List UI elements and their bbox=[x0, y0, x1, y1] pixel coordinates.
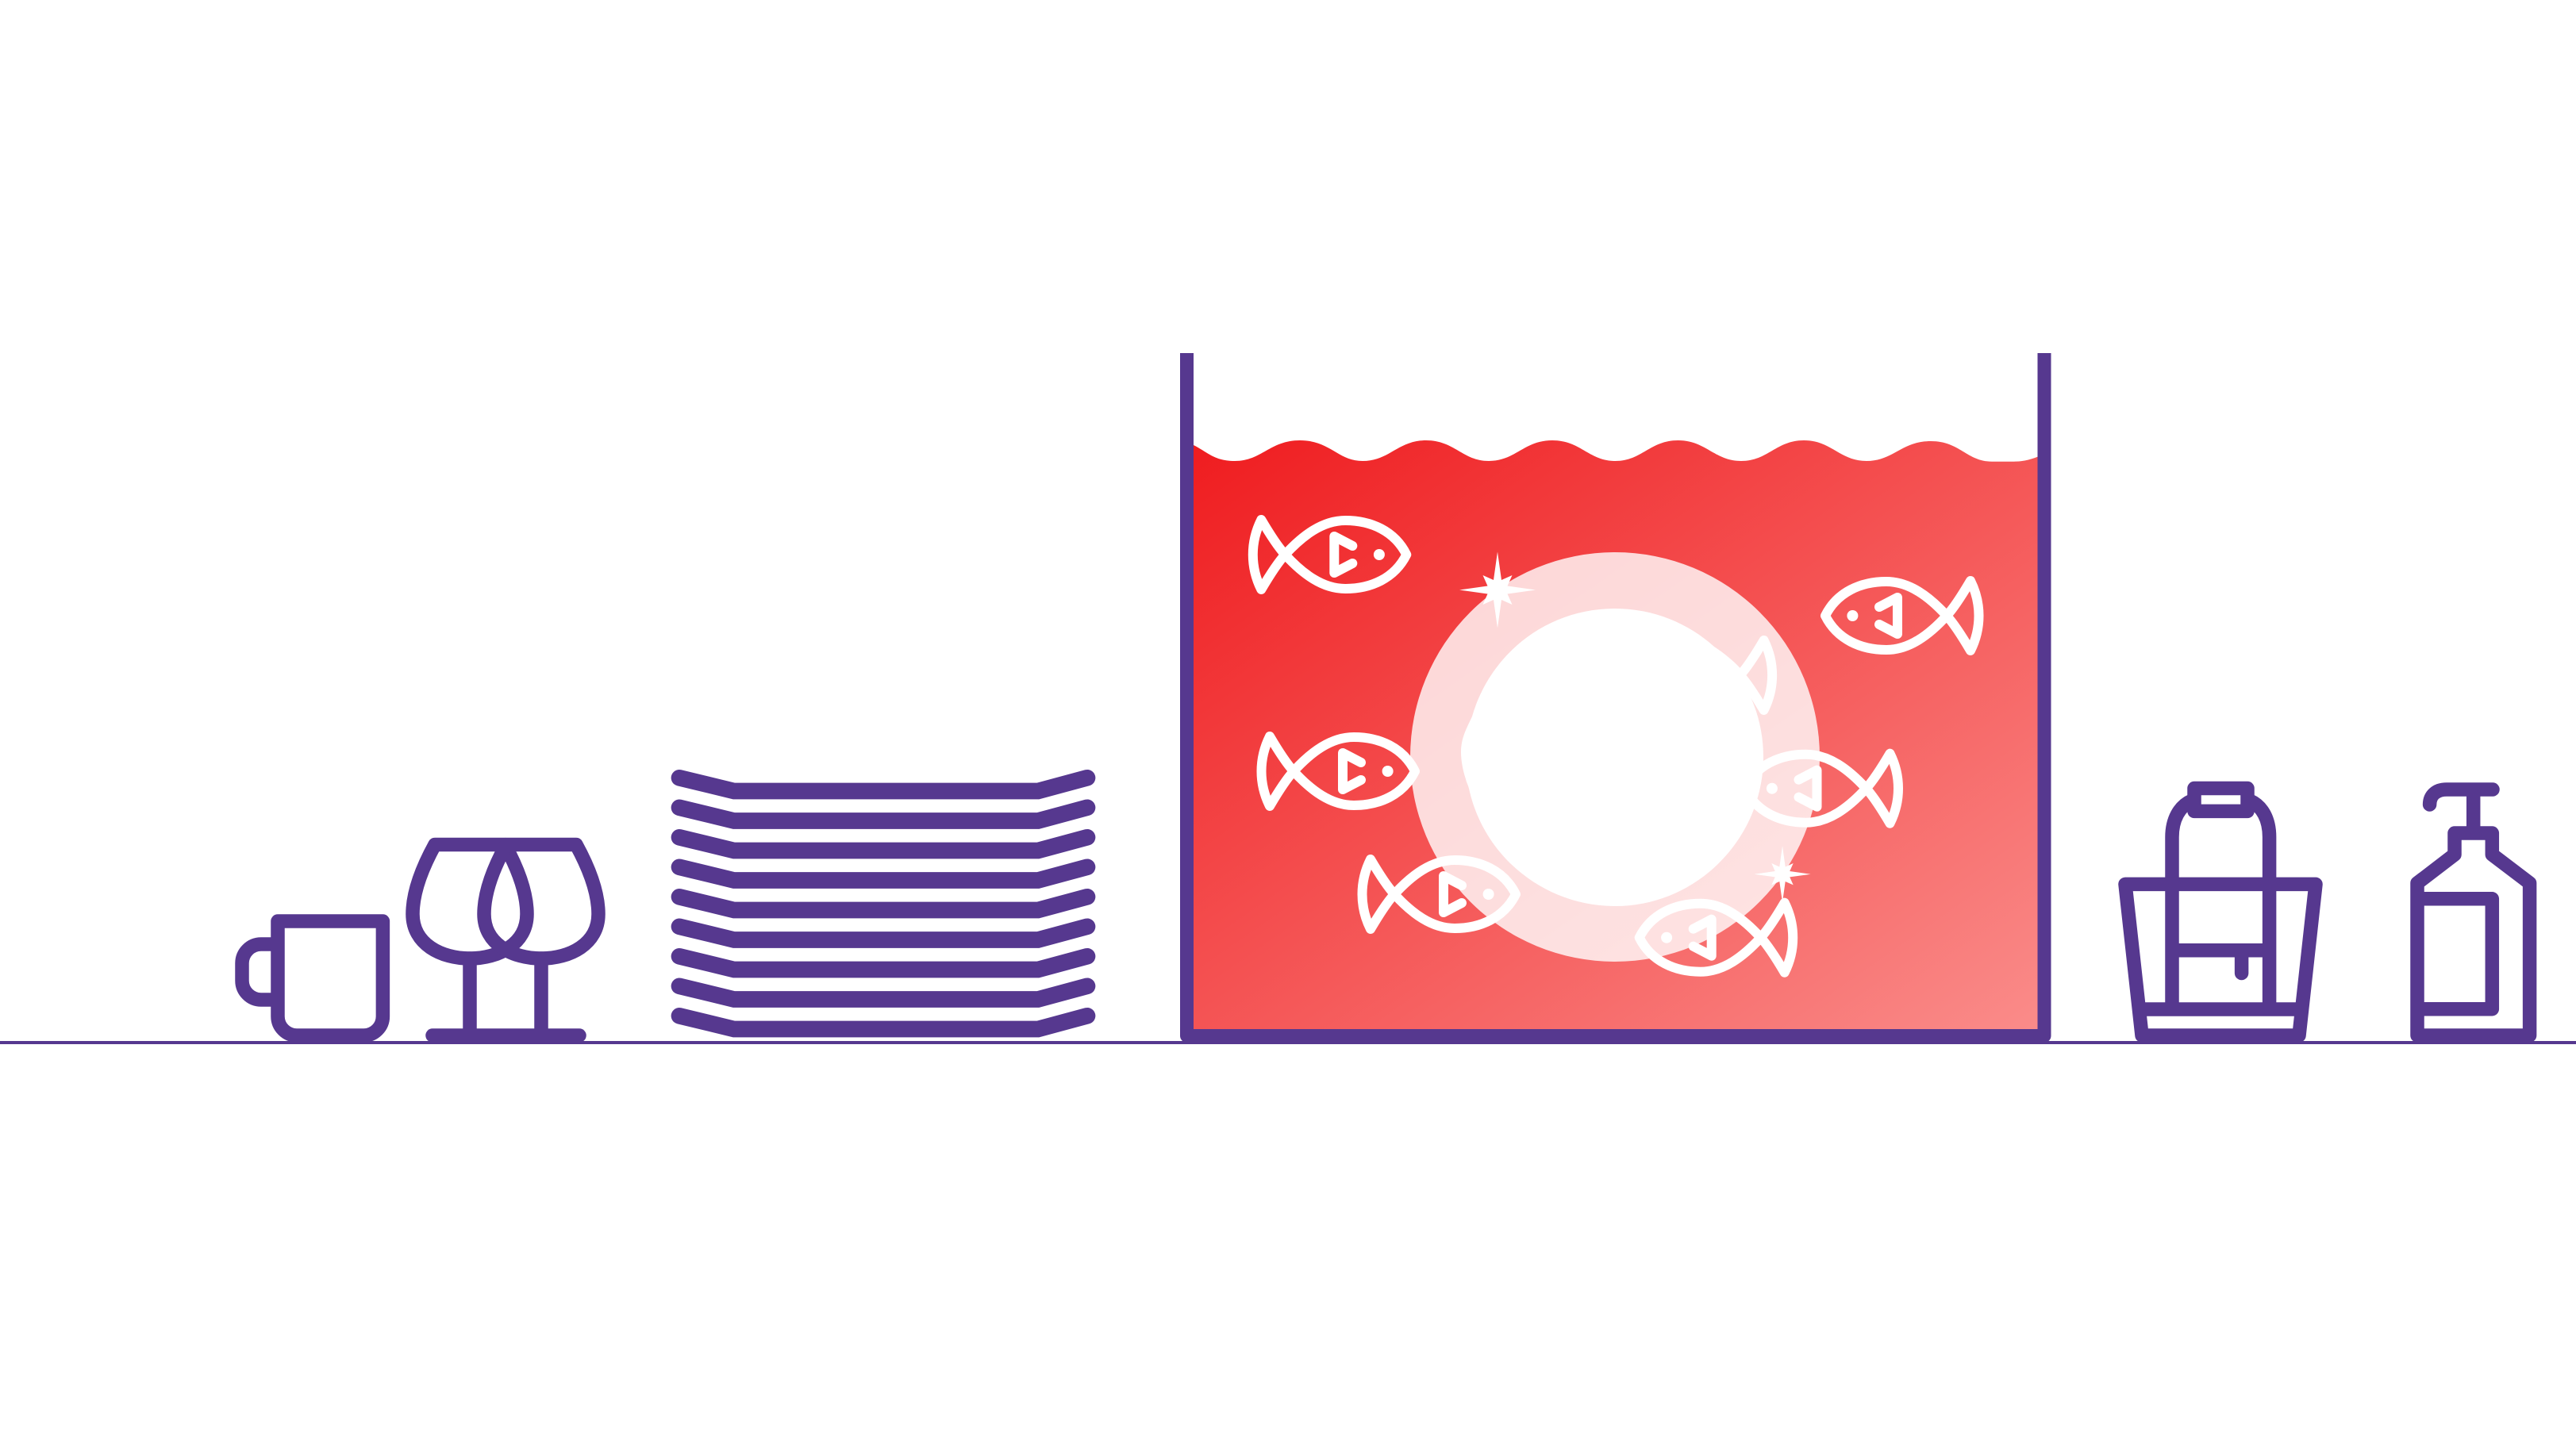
icon: stack of plates bbox=[679, 778, 1087, 1029]
icon: sparkle upper left bbox=[1459, 552, 1536, 628]
icon: mug bbox=[242, 921, 383, 1035]
icon: fish 1 bbox=[1253, 520, 1406, 590]
icon: pump soap bottle bbox=[2417, 789, 2530, 1035]
ground line bbox=[0, 1041, 2576, 1044]
panel: water tank bbox=[1187, 353, 2044, 1036]
icon: fish 6 bbox=[1640, 903, 1793, 973]
icon: fish 4 bbox=[1825, 581, 1979, 651]
water with wavy surface bbox=[1190, 440, 2041, 1031]
icon: sparkle lower right bbox=[1754, 846, 1811, 902]
icon: fish 3 bbox=[1362, 859, 1516, 929]
icon: bottle in bucket bbox=[2125, 789, 2316, 1035]
plate centre bbox=[1461, 609, 1763, 906]
plate rim bbox=[1410, 552, 1820, 962]
icon: wine glasses bbox=[413, 844, 598, 1035]
icon: fish 7 over plate bbox=[1619, 640, 1772, 710]
tank walls bbox=[1187, 353, 2044, 1036]
icon: fish 5 bbox=[1744, 754, 1898, 824]
icon: fish 2 bbox=[1262, 736, 1415, 806]
